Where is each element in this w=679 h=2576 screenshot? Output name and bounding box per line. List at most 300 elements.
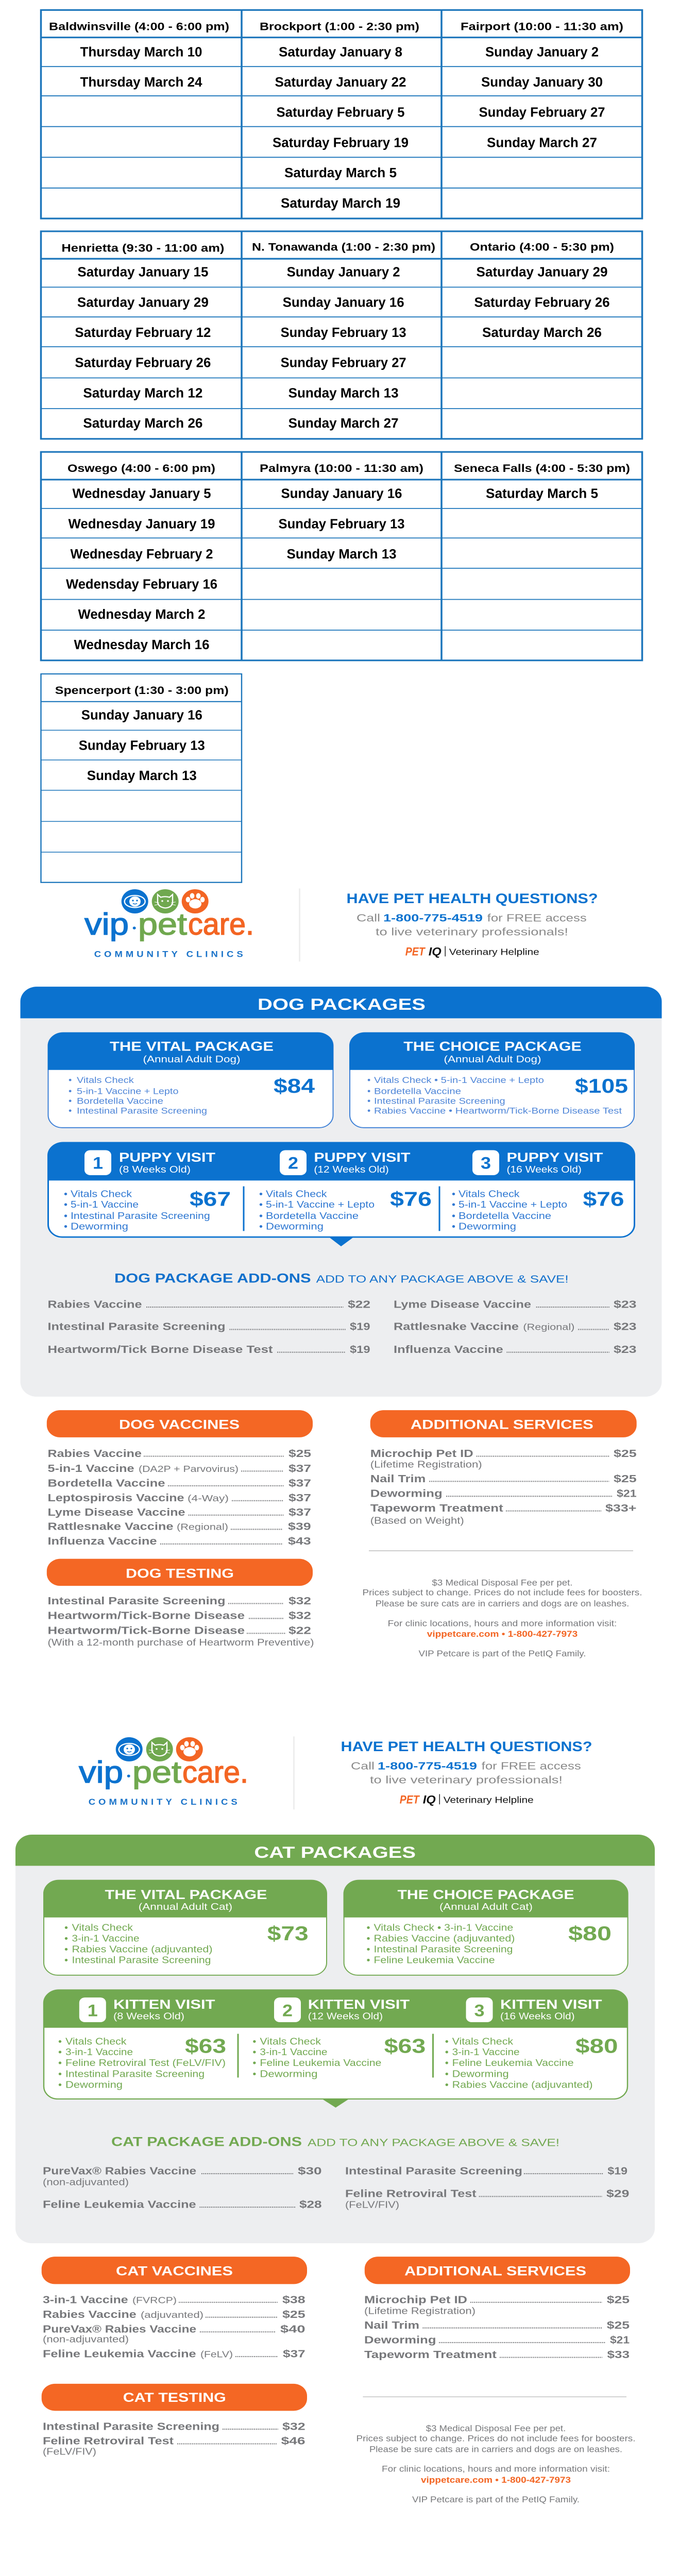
clinic headers: Ontario (4:00 - 5:30 pm) — [470, 240, 614, 253]
puppy visit 3: Vitals Check — [459, 1189, 520, 1199]
helpline copy: Call — [351, 1760, 375, 1772]
logo wordmark — [84, 907, 254, 941]
clinic dates: Wedensday February 16 — [66, 577, 217, 591]
logo wordmark — [79, 1755, 248, 1789]
price list: $25 — [282, 2309, 305, 2320]
clinic dates: Saturday February 5 — [276, 105, 404, 120]
price list: Nail Trim — [364, 2320, 419, 2331]
puppy visit 3: • — [452, 1200, 455, 1210]
price: $105 — [575, 1075, 628, 1097]
kitten visit 1 — [58, 1997, 226, 2090]
price list: $32 — [282, 2421, 305, 2432]
price list: Deworming — [370, 1487, 443, 1499]
price: $84 — [274, 1075, 315, 1097]
clinic dates: Saturday January 29 — [477, 264, 608, 279]
price list: (non-adjuvanted) — [43, 2334, 129, 2345]
price list: $32 — [288, 1609, 311, 1621]
arrow — [329, 1238, 353, 1246]
helpline copy: for FREE access — [482, 1760, 581, 1772]
brand header: dog page — [84, 888, 598, 961]
card: choice package — [344, 1880, 628, 1975]
helpline copy: to live veterinary professionals! — [376, 926, 568, 938]
list — [367, 1075, 622, 1115]
puppy visit 2: • — [259, 1222, 263, 1232]
clinic dates: Saturday February 19 — [273, 135, 409, 150]
puppy visit 1: • — [64, 1211, 67, 1222]
cat packages heading bar — [15, 1835, 655, 1866]
kitten visit 1: Intestinal Parasite Screening — [65, 2069, 205, 2079]
helpline copy: to live veterinary professionals! — [370, 1774, 563, 1786]
logo wordmark: vip — [84, 907, 129, 941]
kitten visit 3: 3 — [474, 2002, 485, 2020]
list: • — [367, 1086, 370, 1096]
dog add-on price list: Influenza Vaccine — [394, 1343, 503, 1355]
list: • — [69, 1086, 72, 1096]
dog add-on price list: Intestinal Parasite Screening — [47, 1320, 226, 1332]
price list: $25 — [614, 1447, 637, 1460]
price list: Lyme Disease Vaccine — [47, 1506, 185, 1518]
puppy visit 2: 5-in-1 Vaccine + Lepto — [266, 1200, 375, 1210]
cat add-on price list: Feline Retroviral Test — [345, 2188, 477, 2199]
kitten visit 1: • — [58, 2037, 62, 2047]
puppy visit 1: PUPPY VISIT — [119, 1150, 215, 1165]
kitten visit 3: • — [445, 2058, 449, 2069]
kitten visit 3: (16 Weeks Old) — [500, 2011, 575, 2022]
price list: Heartworm/Tick-Borne Disease — [47, 1624, 245, 1636]
schedule table: Henrietta, N. Tonawanda, Ontario — [41, 231, 642, 439]
puppy visit 1: Vitals Check — [71, 1189, 132, 1199]
clinic dates: Wednesday February 2 — [70, 546, 213, 562]
puppy visit 3: • — [452, 1189, 455, 1199]
clinic headers: Baldwinsville (4:00 - 6:00 pm) — [49, 20, 229, 32]
icon: cat circle — [146, 1737, 173, 1761]
clinic dates: Saturday March 19 — [281, 195, 400, 211]
logo: PetIQ veterinary helpline: PET — [405, 945, 426, 958]
list: 5-in-1 Vaccine + Lepto — [77, 1086, 179, 1096]
cat add-ons heading: ADD TO ANY PACKAGE ABOVE & SAVE! — [308, 2136, 559, 2148]
puppy visit 2: $76 — [390, 1188, 432, 1210]
logo: vip petcare — [84, 889, 254, 959]
clinic headers — [49, 20, 623, 32]
price list: $25 — [288, 1447, 311, 1460]
price list: $21 — [610, 2334, 630, 2346]
logo wordmark: care. — [182, 1755, 248, 1789]
dog add-ons heading: DOG PACKAGE ADD-ONS — [114, 1271, 311, 1285]
dog add-ons heading — [114, 1271, 569, 1285]
clinic dates: Saturday March 5 — [284, 165, 397, 180]
price list: 5-in-1 Vaccine — [47, 1462, 134, 1475]
kitten visit 3: Feline Leukemia Vaccine — [452, 2058, 574, 2069]
clinic dates: Saturday February 26 — [474, 295, 610, 310]
price list: $37 — [288, 1506, 311, 1518]
price list — [47, 1595, 314, 1648]
price list: (Lifetime Registration) — [370, 1460, 482, 1470]
clinic dates — [66, 486, 598, 652]
kitten visit 2: 2 — [282, 2002, 293, 2020]
puppy visit 1: Intestinal Parasite Screening — [71, 1211, 210, 1222]
puppy visit 2 — [259, 1150, 432, 1232]
dog packages heading bar — [21, 987, 661, 1019]
list: Rabies Vaccine (adjuvanted) — [72, 1944, 212, 1955]
logo tagline: COMMUNITY CLINICS — [89, 1797, 237, 1807]
heading pill — [47, 1559, 313, 1586]
price list: $39 — [288, 1520, 311, 1532]
puppy visit 1: • — [64, 1200, 67, 1210]
clinic dates: Sunday March 13 — [288, 385, 399, 400]
clinic dates: Sunday February 13 — [281, 325, 406, 340]
card: choice package: (Annual Adult Dog) — [444, 1055, 541, 1065]
helpline copy: 1-800-775-4519 — [383, 912, 483, 924]
cat add-on price list: (non-adjuvanted) — [43, 2177, 129, 2188]
logo: PetIQ veterinary helpline: IQ — [429, 945, 442, 958]
puppy visit 3: (16 Weeks Old) — [507, 1165, 582, 1175]
clinic header: Spencerport (1:30 - 3:00 pm) — [55, 684, 229, 697]
kitten visit 3: Vitals Check — [452, 2037, 514, 2047]
price list — [43, 2294, 305, 2360]
kitten visit 3: • — [445, 2080, 449, 2090]
dog add-on price list: Heartworm/Tick Borne Disease Test — [47, 1343, 273, 1355]
dog add-on price list: $19 — [350, 1320, 370, 1332]
puppy visit 2: Vitals Check — [266, 1189, 327, 1199]
dog add-on price list: Rattlesnake Vaccine — [394, 1320, 519, 1332]
logo tagline: COMMUNITY CLINICS — [94, 949, 243, 959]
kitten visit 3: • — [445, 2069, 449, 2079]
price list: Heartworm/Tick-Borne Disease — [47, 1609, 245, 1621]
list: Vitals Check — [72, 1923, 133, 1933]
heading pill — [370, 1410, 637, 1437]
list: • — [367, 1075, 370, 1085]
cat add-on price list: $29 — [606, 2188, 629, 2199]
price list — [370, 1447, 637, 1526]
dog add-on price list: $19 — [350, 1343, 370, 1355]
puppy visit 1: (8 Weeks Old) — [119, 1165, 191, 1175]
heading pill: CAT VACCINES — [116, 2264, 233, 2278]
price list: (adjuvanted) — [141, 2310, 203, 2320]
list: Intestinal Parasite Screening — [72, 1955, 211, 1965]
list: Feline Leukemia Vaccine — [374, 1955, 495, 1965]
kitten visit 2: 3-in-1 Vaccine — [260, 2047, 327, 2058]
puppy visit 2: • — [259, 1200, 263, 1210]
heading pill: CAT TESTING — [123, 2390, 226, 2405]
list: 3-in-1 Vaccine — [72, 1934, 139, 1944]
puppy visit 2: Bordetella Vaccine — [266, 1211, 359, 1222]
clinic dates: Wednesday March 16 — [74, 637, 209, 652]
card: choice package: THE CHOICE PACKAGE — [403, 1039, 582, 1054]
dog add-on price list — [47, 1298, 636, 1355]
kitten visit 2: Feline Leukemia Vaccine — [260, 2058, 381, 2069]
helpline copy: 1-800-775-4519 — [378, 1760, 477, 1772]
heading pill: ADDITIONAL SERVICES — [411, 1417, 593, 1432]
price list: Intestinal Parasite Screening — [43, 2421, 219, 2432]
icon: dog circle — [116, 1737, 143, 1761]
list: • — [64, 1955, 68, 1965]
icon: paw circle — [182, 889, 209, 913]
footnotes: cat page: Prices subject to change. Prices do not include fees for boosters. — [357, 2433, 636, 2443]
puppy visit 1: 1 — [93, 1154, 103, 1173]
card: vital package — [47, 1032, 333, 1128]
price list: Rattlesnake Vaccine — [47, 1520, 173, 1532]
price list: $37 — [288, 1462, 311, 1475]
icon: dog circle — [122, 889, 148, 913]
cat add-on price list: $30 — [298, 2164, 322, 2177]
kitten visit 2: • — [252, 2069, 256, 2079]
heading pill: DOG VACCINES — [119, 1417, 240, 1432]
clinic headers: Oswego (4:00 - 6:00 pm) — [67, 462, 215, 474]
cat add-on price list: (FeLV/FIV) — [345, 2200, 399, 2210]
price list: PureVax® Rabies Vaccine — [43, 2324, 196, 2335]
dog vaccines section — [47, 1410, 313, 1547]
kitten visit 1: Vitals Check — [65, 2037, 127, 2047]
list: • — [64, 1944, 68, 1955]
helpline heading: HAVE PET HEALTH QUESTIONS? — [346, 891, 598, 907]
clinic dates: Sunday March 27 — [487, 135, 597, 150]
list — [69, 1075, 207, 1115]
clinic dates: Sunday January 2 — [485, 44, 599, 59]
cat add-ons heading: CAT PACKAGE ADD-ONS — [111, 2134, 302, 2149]
price list: Leptospirosis Vaccine — [47, 1492, 184, 1504]
heading pill — [42, 2384, 307, 2411]
clinic dates: Sunday January 16 — [81, 707, 202, 722]
schedule table: Oswego, Palmyra, Seneca Falls — [41, 452, 642, 660]
kitten visit 1: Feline Retroviral Test (FeLV/FIV) — [65, 2058, 226, 2069]
clinic dates: Wednesday January 5 — [72, 486, 211, 501]
price list: $32 — [288, 1595, 311, 1607]
clinic dates: Sunday February 13 — [278, 516, 405, 531]
list: Intestinal Parasite Screening — [374, 1944, 513, 1955]
puppy visit 1: • — [64, 1189, 67, 1199]
puppy visit 3: • — [452, 1222, 455, 1232]
dog add-on price list: $23 — [614, 1320, 636, 1332]
helpline copy — [351, 1760, 581, 1786]
helpline copy: for FREE access — [487, 912, 587, 924]
clinic dates: Saturday March 26 — [83, 415, 202, 431]
clinic headers: Henrietta (9:30 - 11:00 am) — [61, 242, 224, 254]
price list: (FeLV) — [200, 2349, 233, 2359]
kitten visit 2: (12 Weeks Old) — [308, 2011, 383, 2022]
cat packages heading bar: CAT PACKAGES — [254, 1843, 416, 1861]
card: kitten visits — [43, 1989, 628, 2108]
price list: (FeLV/FIV) — [43, 2447, 96, 2457]
clinic headers: Seneca Falls (4:00 - 5:30 pm) — [454, 462, 630, 474]
cat testing section — [42, 2384, 307, 2457]
kitten visit 1: • — [58, 2069, 62, 2079]
kitten visit 3: Deworming — [452, 2069, 509, 2079]
list: Intestinal Parasite Screening — [374, 1096, 505, 1106]
kitten visit 1: 3-in-1 Vaccine — [65, 2047, 133, 2058]
price list: Tapeworm Treatment — [364, 2349, 497, 2361]
clinic dates: Saturday January 15 — [77, 264, 208, 279]
logo: PetIQ veterinary helpline: PET — [400, 1793, 420, 1806]
footnotes: cat page: vippetcare.com • 1-800-427-7973 — [421, 2475, 571, 2485]
list: Rabies Vaccine • Heartworm/Tick-Borne Disease Test — [374, 1106, 622, 1115]
price list: Feline Retroviral Test — [43, 2436, 174, 2447]
price list: Rabies Vaccine — [47, 1447, 142, 1460]
puppy visit 2: • — [259, 1211, 263, 1222]
dog add-on price list: $22 — [348, 1298, 370, 1310]
clinic dates: Sunday January 2 — [287, 264, 400, 279]
footnotes: dog page: $3 Medical Disposal Fee per pet. — [432, 1578, 572, 1587]
list: • — [64, 1934, 68, 1944]
clinic headers — [61, 240, 614, 254]
card: vital package: (Annual Adult Dog) — [143, 1055, 241, 1065]
card: choice package — [349, 1032, 635, 1128]
clinic dates: Sunday January 16 — [281, 486, 402, 501]
price list — [364, 2294, 630, 2361]
price list: Intestinal Parasite Screening — [47, 1595, 226, 1607]
price list: (Lifetime Registration) — [364, 2306, 476, 2316]
clinic dates: Sunday February 13 — [79, 738, 205, 753]
dog add-on price list: Rabies Vaccine — [47, 1298, 142, 1310]
list — [64, 1923, 212, 1965]
puppy visit 3: Deworming — [459, 1222, 516, 1232]
logo wordmark: care. — [188, 907, 254, 941]
price list: (FVRCP) — [132, 2295, 177, 2305]
price list: $37 — [288, 1492, 311, 1504]
clinic dates — [75, 264, 610, 431]
kitten visit 3: • — [445, 2047, 449, 2058]
helpline copy: Call — [357, 912, 380, 924]
footnotes: cat page: For clinic locations, hours and more information visit: — [382, 2464, 610, 2473]
cat add-on price list: PureVax® Rabies Vaccine — [43, 2164, 196, 2177]
heading pill: DOG TESTING — [126, 1566, 234, 1581]
footnotes: cat page: VIP Petcare is part of the PetIQ Family. — [412, 2495, 580, 2504]
cat add-on price list: $19 — [607, 2164, 627, 2177]
card: vital package: (Annual Adult Cat) — [139, 1902, 232, 1912]
puppy visit 1 — [64, 1150, 231, 1232]
logo: PetIQ veterinary helpline: Veterinary Helpline — [444, 1795, 534, 1805]
kitten visit 3: • — [445, 2037, 449, 2047]
puppy visit 3: 5-in-1 Vaccine + Lepto — [459, 1200, 567, 1210]
list: Bordetella Vaccine — [77, 1096, 163, 1106]
clinic dates: Saturday March 12 — [83, 385, 202, 400]
price list: $33 — [607, 2349, 630, 2361]
price list: $25 — [607, 2320, 630, 2331]
footnotes: dog page: VIP Petcare is part of the PetIQ Family. — [418, 1649, 586, 1658]
cat vaccines section — [42, 2257, 307, 2360]
price list: (Regional) — [177, 1522, 228, 1532]
puppy visit 2: 2 — [288, 1154, 298, 1173]
price list: $33+ — [605, 1502, 636, 1514]
additional services section: cat page — [364, 2257, 630, 2361]
kitten visit 1: 1 — [88, 2002, 98, 2020]
kitten visit 3 — [445, 1997, 618, 2090]
clinic dates: Sunday February 27 — [281, 355, 406, 370]
footnotes: dog page: Please be sure cats are in carriers and dogs are on leashes. — [376, 1599, 629, 1608]
clinic dates: Sunday January 16 — [283, 295, 404, 310]
kitten visit 2: • — [252, 2037, 256, 2047]
helpline copy — [357, 912, 587, 938]
logo: PetIQ veterinary helpline — [400, 1793, 534, 1806]
clinic dates: Thursday March 10 — [80, 44, 202, 59]
clinic dates: Saturday January 29 — [77, 295, 209, 310]
clinic dates — [79, 707, 205, 783]
cat add-on price list: Feline Leukemia Vaccine — [43, 2198, 196, 2210]
kitten visit 1: $63 — [185, 2035, 226, 2057]
heading pill — [42, 2257, 307, 2284]
puppy visit 3: • — [452, 1211, 455, 1222]
kitten visit 3: $80 — [575, 2035, 618, 2057]
kitten visit 1: (8 Weeks Old) — [113, 2011, 184, 2022]
cat add-on price list: Intestinal Parasite Screening — [345, 2164, 522, 2177]
price list: $40 — [280, 2324, 305, 2335]
list: Vitals Check • 5-in-1 Vaccine + Lepto — [374, 1075, 544, 1085]
dog add-on price list: $23 — [614, 1343, 636, 1355]
list: • — [69, 1075, 72, 1085]
helpline heading: HAVE PET HEALTH QUESTIONS? — [341, 1739, 592, 1755]
logo: PetIQ veterinary helpline: Veterinary Helpline — [449, 947, 539, 957]
puppy visit 2: (12 Weeks Old) — [314, 1165, 389, 1175]
puppy visit 3: PUPPY VISIT — [507, 1150, 603, 1165]
kitten visit 3: KITTEN VISIT — [500, 1997, 602, 2012]
price list: (4-Way) — [188, 1494, 229, 1503]
schedule table: Baldwinsville, Brockport, Fairport — [41, 10, 642, 218]
puppy visit 2: PUPPY VISIT — [314, 1150, 410, 1165]
price list: Nail Trim — [370, 1472, 426, 1485]
cat add-ons heading — [111, 2134, 559, 2149]
footnotes: dog page: For clinic locations, hours and more information visit: — [388, 1618, 617, 1628]
puppy visit 2: Deworming — [266, 1222, 324, 1232]
list: Rabies Vaccine (adjuvanted) — [374, 1934, 515, 1944]
list: • — [367, 1923, 370, 1933]
clinic dates: Saturday March 5 — [486, 486, 598, 501]
logo wordmark: pet — [132, 1755, 182, 1789]
price: $80 — [568, 1922, 612, 1945]
kitten visit 1: • — [58, 2058, 62, 2069]
clinic dates: Saturday March 26 — [482, 325, 602, 340]
puppy visit 1: $67 — [190, 1188, 231, 1210]
list: • — [367, 1096, 370, 1106]
dog testing section — [47, 1559, 314, 1648]
kitten visit 2: • — [252, 2047, 256, 2058]
clinic dates: Sunday March 27 — [288, 415, 399, 431]
price list: Influenza Vaccine — [47, 1535, 157, 1547]
arrow — [322, 2099, 349, 2108]
footnotes: cat page — [357, 2424, 636, 2504]
puppy visit 1: 5-in-1 Vaccine — [71, 1200, 139, 1210]
icon: cat circle — [152, 889, 179, 913]
heading pill: ADDITIONAL SERVICES — [404, 2264, 586, 2278]
logo: PetIQ veterinary helpline: IQ — [423, 1793, 436, 1806]
price list — [43, 2421, 305, 2457]
kitten visit 1: Deworming — [65, 2080, 123, 2090]
price list: $37 — [283, 2348, 305, 2360]
kitten visit 2: Vitals Check — [260, 2037, 321, 2047]
clinic dates: Wednesday January 19 — [68, 516, 215, 531]
list: • — [69, 1106, 72, 1115]
kitten visit 1: KITTEN VISIT — [113, 1997, 215, 2012]
puppy visit 3 — [452, 1150, 624, 1232]
clinic dates: Sunday January 30 — [481, 74, 603, 90]
clinic dates: Saturday February 26 — [75, 355, 211, 370]
card: choice package: (Annual Adult Cat) — [439, 1902, 533, 1912]
heading pill — [365, 2257, 630, 2284]
puppy visit 3: 3 — [481, 1154, 491, 1173]
price list: Rabies Vaccine — [43, 2309, 137, 2320]
price list: (With a 12-month purchase of Heartworm Preventive) — [47, 1638, 314, 1648]
price list: (DA2P + Parvovirus) — [139, 1464, 239, 1474]
puppy visit 2: • — [259, 1189, 263, 1199]
kitten visit 1: • — [58, 2080, 62, 2090]
footnotes: dog page: vippetcare.com • 1-800-427-7973 — [427, 1629, 578, 1639]
price list: $22 — [288, 1624, 311, 1636]
puppy visit 3: $76 — [583, 1188, 624, 1210]
logo wordmark: pet — [138, 907, 188, 941]
kitten visit 1: • — [58, 2047, 62, 2058]
list: • — [69, 1096, 72, 1106]
list: • — [367, 1944, 370, 1955]
clinic headers: Fairport (10:00 - 11:30 am) — [461, 20, 623, 32]
brand header: cat page — [79, 1736, 592, 1809]
